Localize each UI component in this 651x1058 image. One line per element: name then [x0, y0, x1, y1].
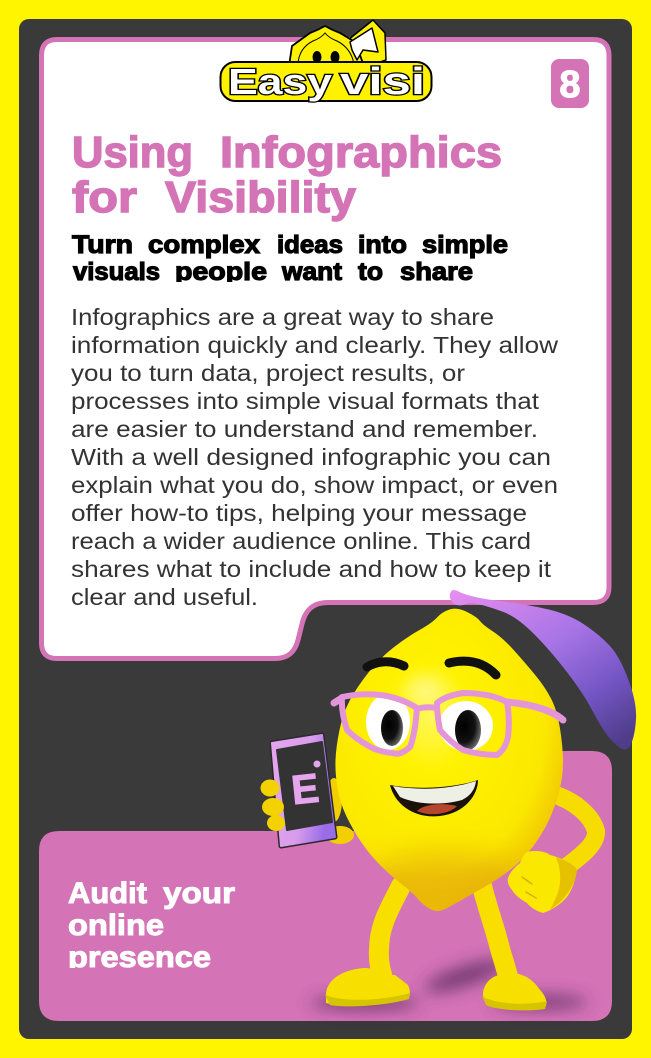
title: Using — [72, 128, 193, 177]
body text: explain what you do, show impact, or even — [71, 472, 558, 498]
card number badge — [551, 59, 589, 108]
logo lemon head — [289, 26, 378, 66]
callout: Audit your online presence: presence — [68, 941, 211, 974]
title — [72, 128, 502, 222]
right hand — [508, 851, 577, 913]
body text: With a well designed infographic you can — [71, 444, 551, 470]
eyes — [366, 694, 493, 751]
body text: Infographics are a great way to share — [71, 304, 494, 330]
logo: Easy Visi — [220, 20, 432, 103]
subtitle — [72, 234, 508, 282]
subtitle: share — [400, 258, 473, 286]
phone — [272, 735, 335, 846]
fingers — [260, 780, 285, 831]
logo megaphone — [348, 20, 386, 66]
title: Infographics — [220, 128, 502, 177]
title: for — [72, 173, 137, 222]
left leg — [379, 886, 401, 985]
mouth — [390, 780, 478, 816]
body text: reach a wider audience online. This card — [71, 528, 531, 554]
callout: Audit your online presence — [68, 881, 236, 968]
lemon mascot — [260, 590, 636, 1010]
lemon body — [335, 609, 563, 917]
panel: white text panel — [42, 40, 609, 658]
subtitle: ideas — [277, 231, 343, 259]
subtitle: Turn — [72, 231, 133, 259]
subtitle: to — [358, 258, 383, 286]
body text: shares what to include and how to keep it — [71, 556, 552, 582]
body text: clear and useful. — [71, 584, 258, 610]
body text: you to turn data, project results, or — [71, 360, 465, 386]
glasses — [334, 693, 563, 755]
logo wordmark — [228, 61, 425, 103]
right arm — [553, 794, 596, 868]
callout: Audit your online presence: your — [163, 877, 235, 910]
logo wordmark: Easy — [228, 61, 332, 102]
body text: are easier to understand and remember. — [71, 416, 538, 442]
phone: E — [289, 765, 321, 813]
logo pill — [220, 62, 432, 101]
subtitle: want — [281, 258, 343, 286]
body text: processes into simple visual formats that — [71, 388, 540, 414]
subtitle: complex — [148, 231, 260, 259]
phone hand palm and thumb — [326, 778, 354, 844]
subtitle: simple — [422, 231, 508, 259]
panel: pink bottom panel — [39, 751, 612, 1021]
eyebrows — [367, 661, 496, 675]
leaf — [450, 590, 636, 750]
logo wordmark: visi — [340, 61, 425, 103]
body text — [71, 304, 559, 610]
right leg — [482, 886, 510, 985]
body text: information quickly and clearly. They allow — [71, 332, 559, 358]
callout: Audit your online presence: online — [68, 909, 164, 942]
callout: Audit your online presence: Audit — [68, 877, 147, 910]
subtitle: people — [175, 258, 267, 286]
left shoe — [325, 968, 410, 1006]
subtitle: visuals — [73, 258, 160, 286]
subtitle: into — [358, 231, 407, 259]
body text: offer how-to tips, helping your message — [71, 500, 527, 526]
ground shadows — [310, 954, 588, 1010]
right shoe — [482, 973, 547, 1010]
title: Visibility — [165, 173, 357, 222]
card number badge: 8 — [559, 64, 581, 106]
